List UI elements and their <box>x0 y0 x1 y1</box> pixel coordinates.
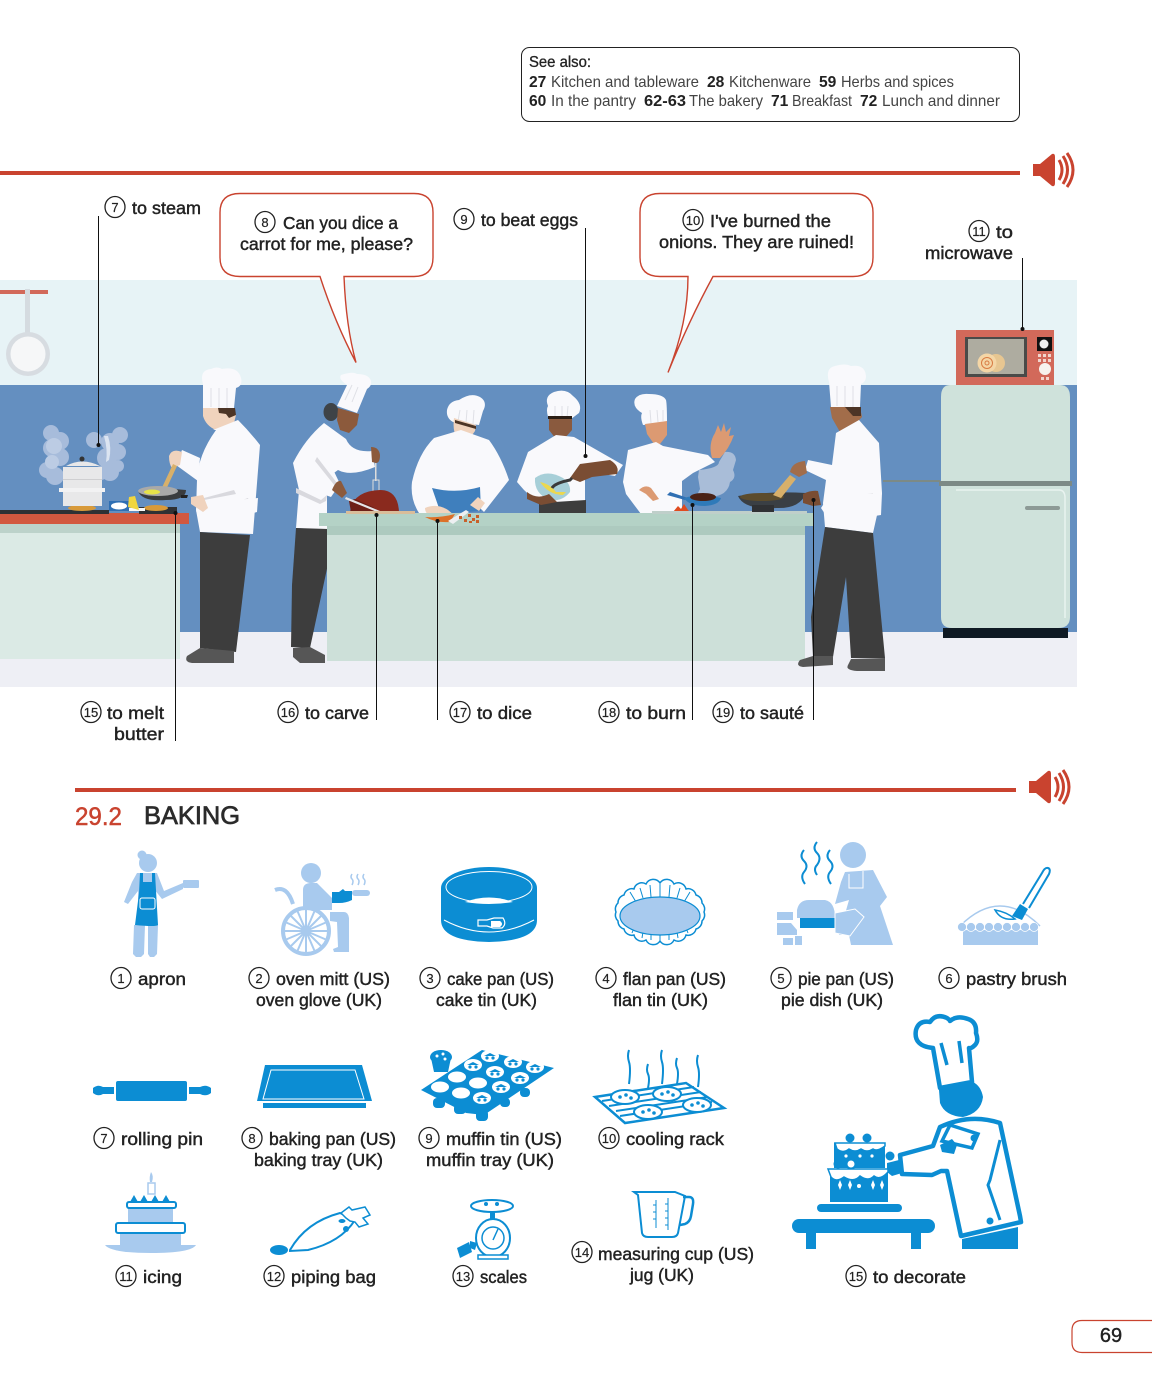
label: cake pan: cake tin (UK) <box>436 990 537 1010</box>
label: pie pan: 5 <box>777 971 785 986</box>
label: apron <box>111 968 186 989</box>
see also box: Herbs and spices <box>841 74 954 91</box>
heading: 29.2 baking: BAKING <box>144 802 240 830</box>
label: flan pan <box>596 968 726 1010</box>
page number tab <box>1072 1320 1152 1352</box>
label: cooling rack <box>599 1128 724 1149</box>
see also box: 62-63 <box>644 93 686 110</box>
icon: measuring cup <box>634 1192 693 1237</box>
label: to microwave: to <box>996 222 1013 242</box>
label: muffin tin: 9 <box>425 1131 433 1146</box>
label: to microwave: microwave <box>925 243 1013 263</box>
left counter <box>0 505 189 659</box>
label: piping bag <box>264 1266 376 1287</box>
label: icing: 11 <box>119 1269 133 1284</box>
label: to melt butter: 15 <box>84 705 98 720</box>
section rule baking <box>75 788 1016 792</box>
label: cooling rack: 10 <box>602 1131 616 1146</box>
center counter <box>319 511 813 661</box>
chef 1 <box>138 368 260 663</box>
see also box <box>522 48 1020 122</box>
see also box: 72 <box>860 93 878 110</box>
label: to carve <box>278 702 369 723</box>
label: to burn: to burn <box>626 703 686 723</box>
see also box: Kitchen and tableware <box>551 74 699 91</box>
label: pastry brush: pastry brush <box>966 969 1067 989</box>
label: to saute: 19 <box>716 705 730 720</box>
section rule top <box>0 171 1020 175</box>
label: flan pan: flan tin (UK) <box>613 990 708 1010</box>
label: to saute: to sauté <box>740 703 804 723</box>
label: to beat eggs: 9 <box>460 212 468 227</box>
see also box: 60 <box>529 93 547 110</box>
label: to dice: 17 <box>453 705 467 720</box>
icon: apron <box>124 850 199 957</box>
label: scales: scales <box>480 1267 527 1287</box>
steam left <box>39 425 128 485</box>
label: oven mitt: 2 <box>255 971 263 986</box>
icon: baking pan <box>257 1065 372 1108</box>
label: muffin tin: muffin tin (US) <box>446 1129 562 1149</box>
icon: speaker baking <box>1029 770 1069 804</box>
carrot and diced carrot <box>425 510 479 524</box>
label: cake pan: 3 <box>426 971 434 986</box>
chef 5 <box>623 394 734 514</box>
label: oven mitt: oven mitt (US) <box>276 969 390 989</box>
label: rolling pin: rolling pin <box>121 1129 203 1149</box>
label: rolling pin <box>94 1128 203 1149</box>
speech bubble 10: onions. They are ruined! <box>659 232 854 252</box>
label: pie pan <box>771 968 894 1010</box>
label: apron: 1 <box>117 971 125 986</box>
chef 2 <box>291 373 399 663</box>
chef 6 <box>790 364 885 671</box>
chef 4 <box>517 391 623 513</box>
speech bubble 8: carrot for me, please? <box>240 234 413 254</box>
speech bubble 10: I've burned the <box>710 211 831 231</box>
label: measuring cup <box>572 1242 754 1285</box>
icon: rolling pin <box>93 1081 211 1101</box>
see also box: In the pantry <box>551 93 636 110</box>
label: piping bag: piping bag <box>291 1267 376 1287</box>
label: rolling pin: 7 <box>100 1131 108 1146</box>
label: to decorate: 15 <box>849 1269 863 1284</box>
label: cooling rack: cooling rack <box>626 1129 724 1149</box>
label: to melt butter <box>81 702 164 744</box>
speech bubble 8: Can you dice a <box>283 213 398 233</box>
label: to dice: to dice <box>477 703 532 723</box>
label: to beat eggs: to beat eggs <box>481 210 578 230</box>
hanging pan <box>0 289 50 376</box>
heading: 29.2 baking <box>75 802 240 831</box>
label: to dice <box>450 702 532 723</box>
label: oven mitt: oven glove (UK) <box>256 990 382 1010</box>
icon: pastry brush <box>958 868 1050 945</box>
see also box: The bakery <box>689 93 763 110</box>
label: baking pan: 8 <box>248 1131 256 1146</box>
label: pastry brush: 6 <box>945 971 953 986</box>
speech bubble 8: 8 <box>261 215 269 230</box>
label: baking pan: baking pan (US) <box>269 1129 396 1149</box>
label: to steam: to steam <box>132 198 201 218</box>
icon: to decorate <box>792 1016 1021 1249</box>
butter <box>109 496 145 511</box>
label: measuring cup: measuring cup (US) <box>598 1244 754 1264</box>
speech bubble 8 <box>220 194 433 362</box>
label: to microwave: 11 <box>972 224 986 239</box>
icon: icing <box>105 1172 196 1253</box>
icon: pie pan <box>777 842 893 945</box>
label: measuring cup: 14 <box>575 1245 589 1260</box>
speech bubble 10: 10 <box>686 213 700 228</box>
see also box: Kitchenware <box>729 74 811 91</box>
label: oven mitt <box>249 968 390 1010</box>
label: cake pan: cake pan (US) <box>447 969 554 989</box>
label: cake pan <box>420 968 554 1010</box>
speech bubble 10 <box>640 194 873 372</box>
wok right <box>738 475 806 512</box>
label: to carve: to carve <box>305 703 369 723</box>
label: icing: icing <box>143 1267 182 1287</box>
smoke and burning pan <box>667 452 736 512</box>
label: muffin tin: muffin tray (UK) <box>426 1150 554 1170</box>
fridge <box>883 385 1072 638</box>
label: to microwave <box>925 220 1013 263</box>
label: pie pan: pie pan (US) <box>798 969 894 989</box>
leader lines <box>96 216 1024 741</box>
see also box: Lunch and dinner <box>882 93 1000 110</box>
label: measuring cup: jug (UK) <box>629 1265 694 1285</box>
label: pie pan: pie dish (UK) <box>781 990 883 1010</box>
see also box: 59 <box>819 74 837 91</box>
label: apron: apron <box>138 969 186 989</box>
label: flan pan: 4 <box>602 971 610 986</box>
icon: muffin tin <box>421 1050 554 1121</box>
label: piping bag: 12 <box>267 1269 281 1284</box>
label: to saute <box>713 702 804 723</box>
label: baking pan: baking tray (UK) <box>254 1150 383 1170</box>
heading: 29.2 baking: 29.2 <box>75 803 122 831</box>
icon: piping bag <box>270 1207 370 1255</box>
label: baking pan <box>242 1128 396 1170</box>
see also box: 28 <box>707 74 725 91</box>
label: to decorate: to decorate <box>873 1267 966 1287</box>
label: flan pan: flan pan (US) <box>623 969 726 989</box>
label: to steam <box>105 196 201 218</box>
label: scales <box>453 1266 527 1287</box>
kitchen scene <box>0 280 1077 687</box>
see also box: See also: <box>529 54 591 71</box>
icon: cake pan <box>441 867 537 942</box>
icon: scales <box>457 1200 513 1259</box>
see also box: Breakfast <box>792 93 853 110</box>
icon: oven mitt <box>275 863 370 954</box>
page number tab: 69 <box>1100 1325 1122 1347</box>
label: to steam: 7 <box>111 200 119 215</box>
icon: cooling rack <box>595 1050 724 1123</box>
see also box: 71 <box>771 93 789 110</box>
label: to melt butter: butter <box>114 724 164 744</box>
microwave <box>956 330 1054 385</box>
steaming pot <box>59 456 105 506</box>
label: to melt butter: to melt <box>107 703 164 723</box>
label: icing <box>116 1266 182 1287</box>
see also box: 27 <box>529 74 546 91</box>
icon: flan pan <box>615 879 705 945</box>
chef 3 <box>412 395 509 517</box>
label: to burn <box>599 702 686 723</box>
label: to decorate <box>846 1266 966 1287</box>
icon: speaker top <box>1033 153 1073 187</box>
label: to burn: 18 <box>602 705 616 720</box>
label: muffin tin <box>419 1128 562 1170</box>
label: scales: 13 <box>456 1269 470 1284</box>
label: to carve: 16 <box>281 705 295 720</box>
